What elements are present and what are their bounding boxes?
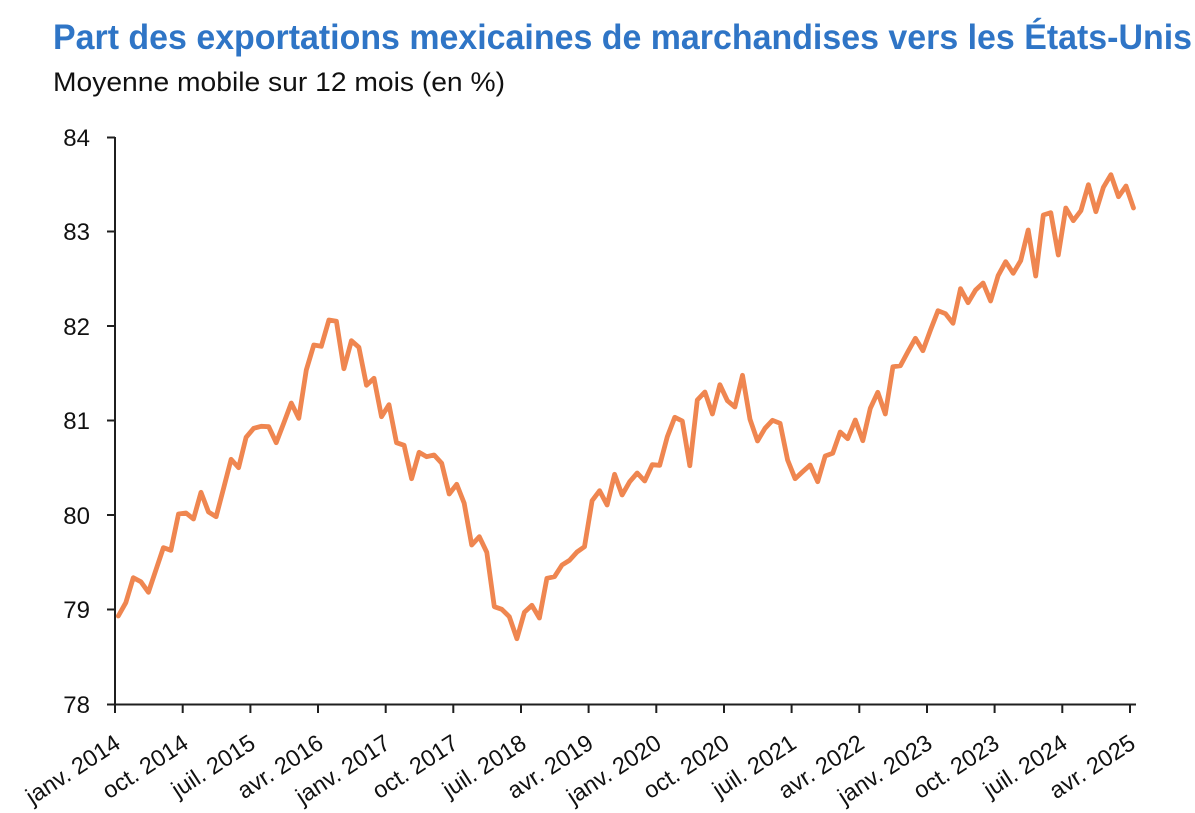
x axis labels: avr. 2025 (1044, 729, 1140, 804)
y axis labels: 79 (63, 597, 90, 624)
y axis (107, 137, 115, 704)
x axis labels: janv. 2014 (20, 729, 125, 810)
x axis labels: janv. 2020 (561, 729, 666, 810)
x axis labels: juil. 2015 (166, 729, 260, 803)
x axis labels: juil. 2021 (707, 729, 801, 803)
y axis labels (63, 125, 90, 719)
y axis labels: 81 (63, 408, 90, 435)
x axis labels: oct. 2017 (367, 729, 463, 804)
subtitle: Moyenne mobile sur 12 mois (en %) (53, 67, 505, 97)
y axis labels: 78 (63, 692, 90, 719)
x axis labels: oct. 2020 (638, 729, 734, 804)
x axis labels (20, 729, 1140, 810)
x axis labels: oct. 2023 (908, 729, 1004, 804)
x axis labels: avr. 2022 (773, 729, 869, 804)
x axis labels: juil. 2024 (978, 729, 1072, 803)
y axis labels: 84 (63, 125, 90, 152)
x axis labels: janv. 2017 (290, 729, 395, 810)
y axis labels: 80 (63, 503, 90, 530)
x axis (107, 704, 1136, 713)
y axis labels: 83 (63, 219, 90, 246)
x axis labels: juil. 2018 (437, 729, 531, 803)
x axis labels: avr. 2019 (502, 729, 598, 804)
line chart: export share (118, 175, 1134, 639)
title: Part des exportations mexicaines de marchandises vers les États-Unis (53, 17, 1192, 57)
x axis labels: oct. 2014 (97, 729, 193, 804)
y axis labels: 82 (63, 314, 90, 341)
x axis labels: avr. 2016 (232, 729, 328, 804)
x axis labels: janv. 2023 (832, 729, 937, 810)
